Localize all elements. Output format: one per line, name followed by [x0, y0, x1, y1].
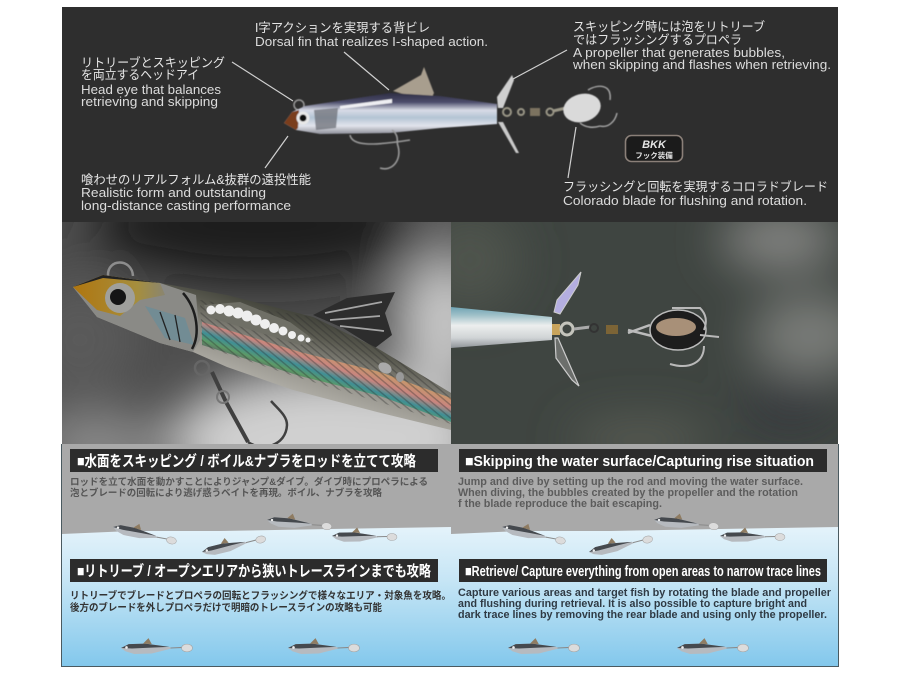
silver scales [204, 302, 314, 345]
icon: BKK hook badge [626, 136, 682, 162]
callout: dorsal fin [255, 20, 488, 49]
propeller blades [554, 272, 581, 314]
body text: retrieve JP [70, 589, 451, 614]
panel: top product diagram [62, 7, 838, 222]
panel: skipping and retrieve (English) [451, 444, 838, 666]
leader line: realistic form [265, 136, 288, 168]
line eye ring [108, 262, 133, 276]
rear spots [378, 362, 392, 374]
callout: head eye: Head eye that balances [81, 82, 221, 97]
swivel [552, 323, 652, 336]
body text: retrieve EN [458, 587, 832, 621]
callout: dorsal fin: I字アクションを実現する背ビレ [255, 20, 430, 35]
body text: skipping EN: f the blade reproduce the bait escaping. [458, 498, 662, 510]
callout: Colorado blade: フラッシングと回転を実現するコロラドブレード [563, 179, 828, 194]
leader line: head eye [232, 62, 293, 101]
callout: head eye: を両立するヘッドアイ [81, 68, 199, 82]
icon: BKK hook badge: BKK [642, 139, 667, 151]
panel: skipping and retrieve (Japanese) [62, 444, 451, 666]
callout: Colorado blade [563, 179, 828, 208]
callout: realistic form [81, 172, 311, 213]
panel: propeller and blade close-up photo [451, 222, 838, 444]
fish group: skipping EN [501, 511, 785, 557]
callout: propeller: when skipping and flashes when retrieving. [572, 57, 831, 72]
body text: skipping JP [70, 476, 428, 499]
scale texture [200, 300, 451, 424]
body text: retrieve JP: リトリーブでブレードとプロペラの回転とフラッシングで様々なエリア・対象魚を攻略。 [70, 589, 451, 602]
callout: realistic form: long-distance casting performance [81, 198, 291, 213]
callout: propeller [572, 19, 831, 72]
body text: skipping EN: When diving, the bubbles created by the propeller and the rotation [458, 487, 798, 499]
panel: head close-up photo [62, 222, 451, 444]
callout: head eye [81, 55, 225, 109]
body text: skipping JP: ロッドを立て水面を動かすことによりジャンプ&ダイブ。ダイブ時にプロペラによる [70, 476, 428, 488]
body text: retrieve EN: Capture various areas and target fish by rotating the blade and propeller [458, 587, 832, 599]
hook [195, 361, 287, 447]
header: retrieve JP [70, 559, 438, 582]
holographic stripe [202, 322, 451, 422]
body [73, 275, 451, 430]
header: skipping EN: ■Skipping the water surface/Capturing rise situation [465, 453, 814, 470]
fish group: retrieve [121, 638, 360, 654]
header: skipping JP: ■水面をスキッピング / ボイル&ナブラをロッドを立てて攻略 [77, 452, 416, 470]
callout: propeller: ではフラッシングするプロペラ [573, 33, 742, 47]
header: retrieve EN [459, 559, 827, 582]
tail section [451, 307, 552, 348]
callout: head eye: retrieving and skipping [81, 94, 218, 109]
head [73, 275, 200, 352]
eye [105, 283, 135, 313]
body text: skipping EN: Jump and dive by setting up the rod and moving the water surface. [458, 476, 803, 488]
header: retrieve JP: ■リトリーブ / オープンエリアから狭いトレースラインまでも攻略 [77, 562, 431, 580]
callout: propeller: スキッピング時には泡をリトリーブ [573, 19, 765, 34]
callout: head eye: リトリーブとスキッピング [81, 55, 225, 70]
callout: realistic form: Realistic form and outstanding [81, 185, 266, 200]
icon: BKK hook badge: フック装備 [635, 150, 673, 160]
header: skipping JP [70, 449, 438, 472]
leader line: Colorado blade [568, 127, 576, 178]
fish group: retrieve EN [508, 638, 748, 654]
leader line: propeller [513, 50, 567, 79]
fin [313, 292, 395, 348]
leader line: dorsal fin [344, 52, 389, 90]
callout: Colorado blade: Colorado blade for flushing and rotation. [563, 193, 807, 208]
callout: propeller: A propeller that generates bubbles, [573, 45, 785, 60]
body text: skipping JP: 泡とブレードの回転により逃げ惑うベイトを再現。ボイル、ナブラを攻略 [70, 487, 382, 499]
body text: retrieve EN: dark trace lines by removing the rear blade and using only the propeller. [458, 609, 827, 621]
lure illustration [284, 67, 617, 169]
Colorado blade [650, 308, 719, 366]
fish group: skipping [112, 511, 397, 557]
callout: realistic form: 喰わせのリアルフォルム&抜群の遠投性能 [81, 172, 311, 187]
callout: dorsal fin: Dorsal fin that realizes I-shaped action. [255, 34, 488, 49]
body text: retrieve JP: 後方のブレードを外しプロペラだけで明暗のトレースラインの攻略も可能 [70, 601, 382, 614]
body text: retrieve EN: and flushing during retrieval. It is also possible to capture bright and [458, 598, 807, 610]
body text: skipping EN [458, 476, 803, 510]
